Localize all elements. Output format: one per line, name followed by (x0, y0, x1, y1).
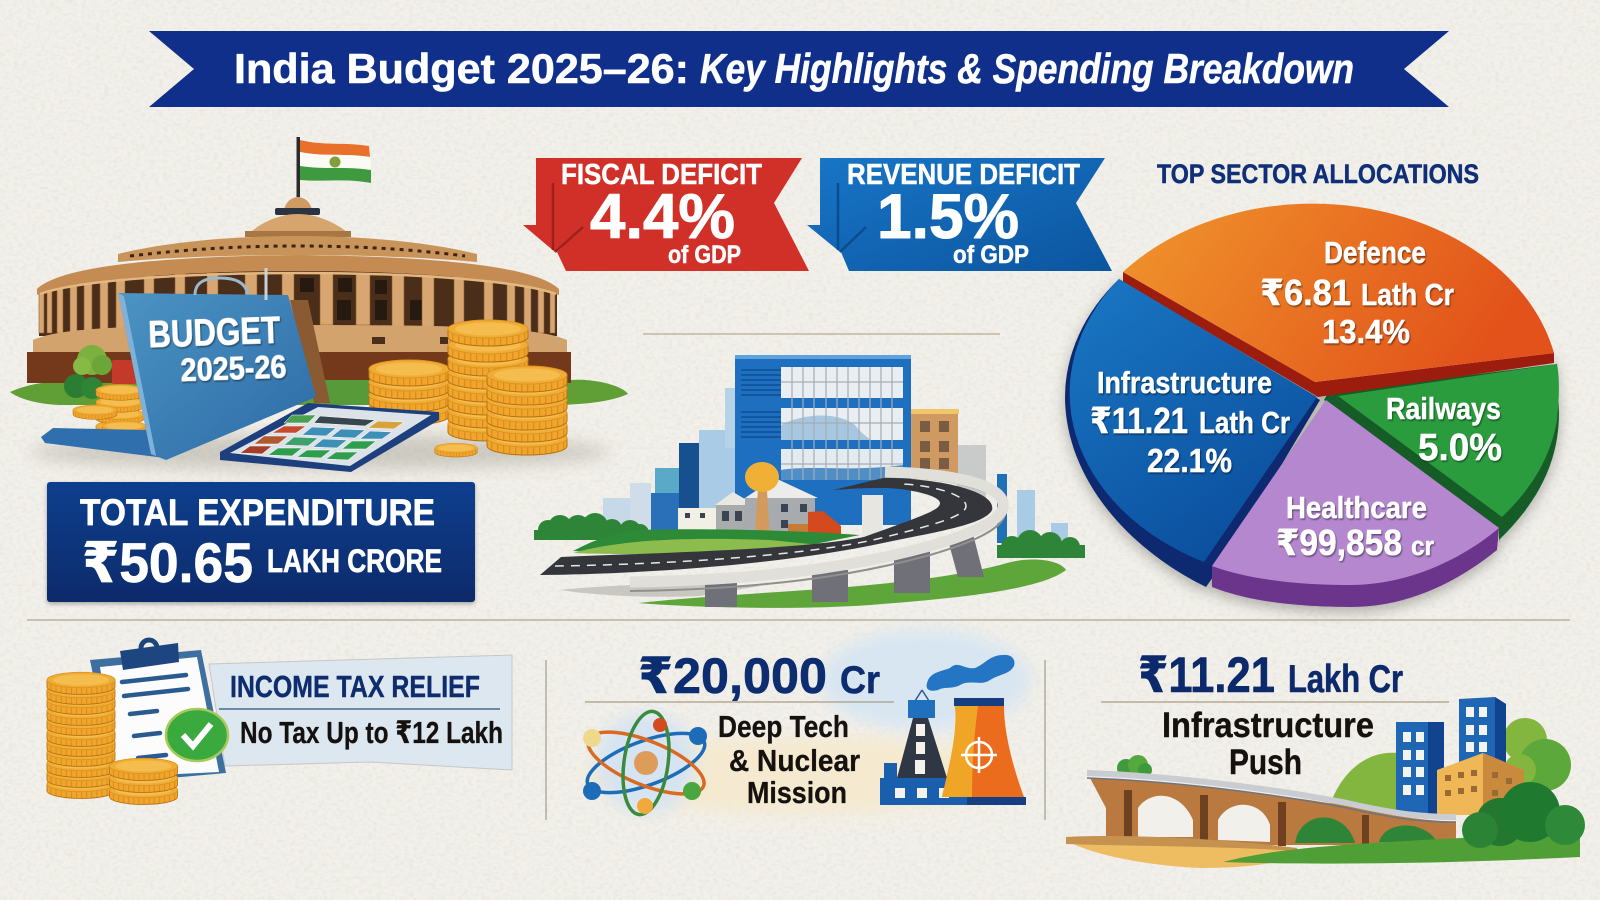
stairs (290, 300, 330, 403)
slice: infrastructure (1070, 279, 1317, 562)
relief text (219, 669, 503, 750)
clipboard (90, 640, 226, 783)
push text: Infrastructure (1162, 706, 1374, 745)
extruded pie base (1065, 272, 1559, 607)
buildings (1396, 697, 1524, 815)
mission text (718, 709, 860, 810)
left coin stack (369, 360, 449, 425)
pie labels: Infrastructure (1097, 365, 1272, 400)
smoke (927, 655, 1015, 691)
mission text: & Nuclear (729, 743, 860, 778)
vertical divider (545, 660, 547, 820)
pie labels: Lath Cr (1361, 277, 1454, 312)
pie labels: 5.0% (1418, 427, 1502, 469)
flyover piers (705, 495, 984, 607)
cooling tower (942, 698, 1026, 805)
check badge (166, 709, 228, 761)
lawn (10, 379, 628, 405)
pie labels: 13.4% (1322, 313, 1410, 350)
tall coin stack (47, 672, 115, 798)
central windows (300, 278, 422, 320)
pie labels: cr (1411, 531, 1434, 561)
book title: BUDGET (148, 310, 281, 356)
income tax relief panel (47, 640, 512, 804)
trees and bushes (1117, 718, 1571, 815)
city and flyover illustration (534, 334, 1085, 608)
deep tech and nuclear mission panel (580, 630, 1030, 818)
lower band (33, 325, 567, 352)
amount: Lakh Cr (1288, 658, 1403, 701)
sand bank (1066, 838, 1297, 868)
brown base (27, 352, 571, 383)
sand wash (585, 737, 1015, 813)
road surface (540, 478, 992, 575)
amount: ₹11.21 (1138, 647, 1275, 703)
mission text: Deep Tech (718, 709, 849, 744)
tall coin stack (448, 320, 528, 441)
atom glow (596, 713, 696, 813)
revenue deficit ribbon: 1.5% (877, 182, 1019, 252)
revenue deficit ribbon: of GDP (953, 241, 1029, 269)
bridge (1066, 773, 1456, 851)
dark wall (39, 262, 557, 336)
upper drum (118, 236, 477, 262)
amount: Cr (840, 659, 880, 702)
single coin (435, 443, 477, 457)
title text: India Budget 2025–26: (234, 45, 689, 92)
tree (64, 345, 112, 399)
road markings (555, 484, 966, 566)
pie labels: Lath Cr (1199, 405, 1290, 440)
houses (678, 478, 841, 538)
dome (245, 197, 351, 237)
mission text: Mission (747, 775, 847, 810)
left coin piles (73, 385, 146, 436)
total expenditure box: TOTAL EXPENDITURE (80, 492, 435, 533)
fiscal deficit ribbon (523, 158, 809, 271)
parliament and budget illustration (10, 137, 628, 472)
sky wash (820, 630, 1030, 730)
title text: Key Highlights & Spending Breakdown (700, 45, 1354, 92)
pie chart (1065, 204, 1559, 607)
revenue deficit ribbon (807, 158, 1112, 271)
ground shadow (30, 434, 610, 470)
amount (1138, 647, 1403, 703)
slice: defence (1123, 204, 1554, 382)
shrubs and lawns (534, 513, 1085, 558)
fiscal deficit ribbon: 4.4% (590, 182, 735, 252)
flyover shadow (560, 584, 760, 597)
total expenditure box (47, 482, 475, 602)
fiscal deficit ribbon: FISCAL DEFICIT (561, 159, 762, 191)
flag (296, 137, 371, 197)
central lawn patch (324, 380, 384, 405)
relief text: INCOME TAX RELIEF (230, 669, 480, 704)
revenue deficit ribbon: REVENUE DEFICIT (847, 159, 1080, 191)
amount: ₹20,000 (638, 648, 827, 704)
columns (39, 273, 555, 333)
total expenditure box: LAKH CRORE (267, 543, 442, 579)
golden lamp monument (745, 462, 779, 542)
pie labels: Healthcare (1286, 490, 1427, 525)
orange building (911, 409, 959, 478)
slice: healthcare (1212, 400, 1499, 585)
pie labels: ₹99,858 (1276, 522, 1402, 563)
pie labels: ₹6.81 (1260, 272, 1351, 313)
pie labels: ₹11.21 (1090, 400, 1188, 441)
pie labels (1090, 235, 1502, 563)
slice: railways (1338, 364, 1559, 517)
title text (234, 45, 1354, 92)
ground under flyover (638, 560, 1066, 608)
pie labels: 22.1% (1147, 442, 1232, 479)
pie chart heading: TOP SECTOR ALLOCATIONS (1157, 159, 1479, 189)
background skyline (603, 388, 1068, 543)
book title: 2025-26 (180, 349, 287, 388)
calculator (220, 403, 439, 472)
book title (148, 310, 287, 389)
fiscal deficit ribbon: of GDP (668, 241, 741, 269)
atom icon (580, 708, 712, 818)
main roof (37, 255, 559, 295)
relief banner (209, 655, 512, 770)
red bag (112, 360, 136, 384)
section divider (27, 619, 1570, 621)
vertical divider (1044, 660, 1046, 820)
pie labels: Railways (1386, 391, 1501, 426)
push text: Push (1229, 743, 1302, 782)
main office tower (735, 355, 911, 525)
infrastructure push panel (1066, 647, 1585, 868)
reactor tower (880, 690, 967, 805)
relief text: No Tax Up to ₹12 Lakh (240, 715, 503, 750)
flyover parapet (630, 477, 1005, 591)
small coin stack (110, 758, 178, 804)
push text (1162, 706, 1374, 782)
foreground greenery (1223, 782, 1585, 864)
front coin stack (487, 366, 567, 455)
total expenditure box: ₹50.65 (82, 531, 253, 594)
pie labels: Defence (1324, 235, 1426, 270)
budget book (41, 268, 316, 460)
title banner (149, 31, 1449, 107)
